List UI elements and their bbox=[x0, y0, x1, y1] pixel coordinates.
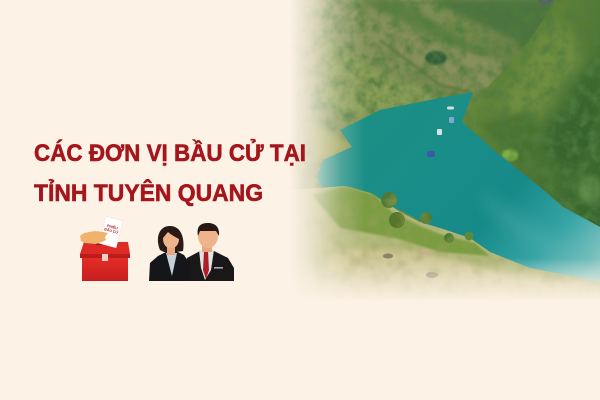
title bbox=[34, 138, 306, 207]
soft fade: left edge bbox=[280, 0, 361, 299]
terraced bank bbox=[311, 129, 350, 158]
soft fade: bottom edge bbox=[296, 260, 600, 301]
back mountains bbox=[293, 0, 600, 227]
foreground hillside bbox=[298, 186, 600, 298]
title: CÁC ĐƠN VỊ BẦU CỬ TẠI bbox=[34, 138, 306, 167]
river bbox=[317, 92, 600, 295]
landscape photo: river valley bbox=[293, 0, 600, 298]
title: TỈNH TUYÊN QUANG bbox=[34, 178, 263, 207]
infographic canvas bbox=[34, 0, 600, 298]
ballot paper bbox=[99, 216, 123, 248]
man bbox=[186, 223, 234, 281]
boats bbox=[427, 106, 454, 157]
ballot paper: BẦU CỬ bbox=[104, 226, 119, 235]
box body bbox=[82, 258, 128, 281]
ballot paper: PHIẾU bbox=[106, 223, 119, 231]
right mountain bbox=[461, 0, 600, 227]
icon: ballot box with hand bbox=[80, 216, 130, 281]
box lid bbox=[80, 242, 130, 254]
woman bbox=[149, 226, 190, 281]
icon: two candidates bbox=[149, 223, 234, 281]
hand bbox=[80, 231, 108, 244]
